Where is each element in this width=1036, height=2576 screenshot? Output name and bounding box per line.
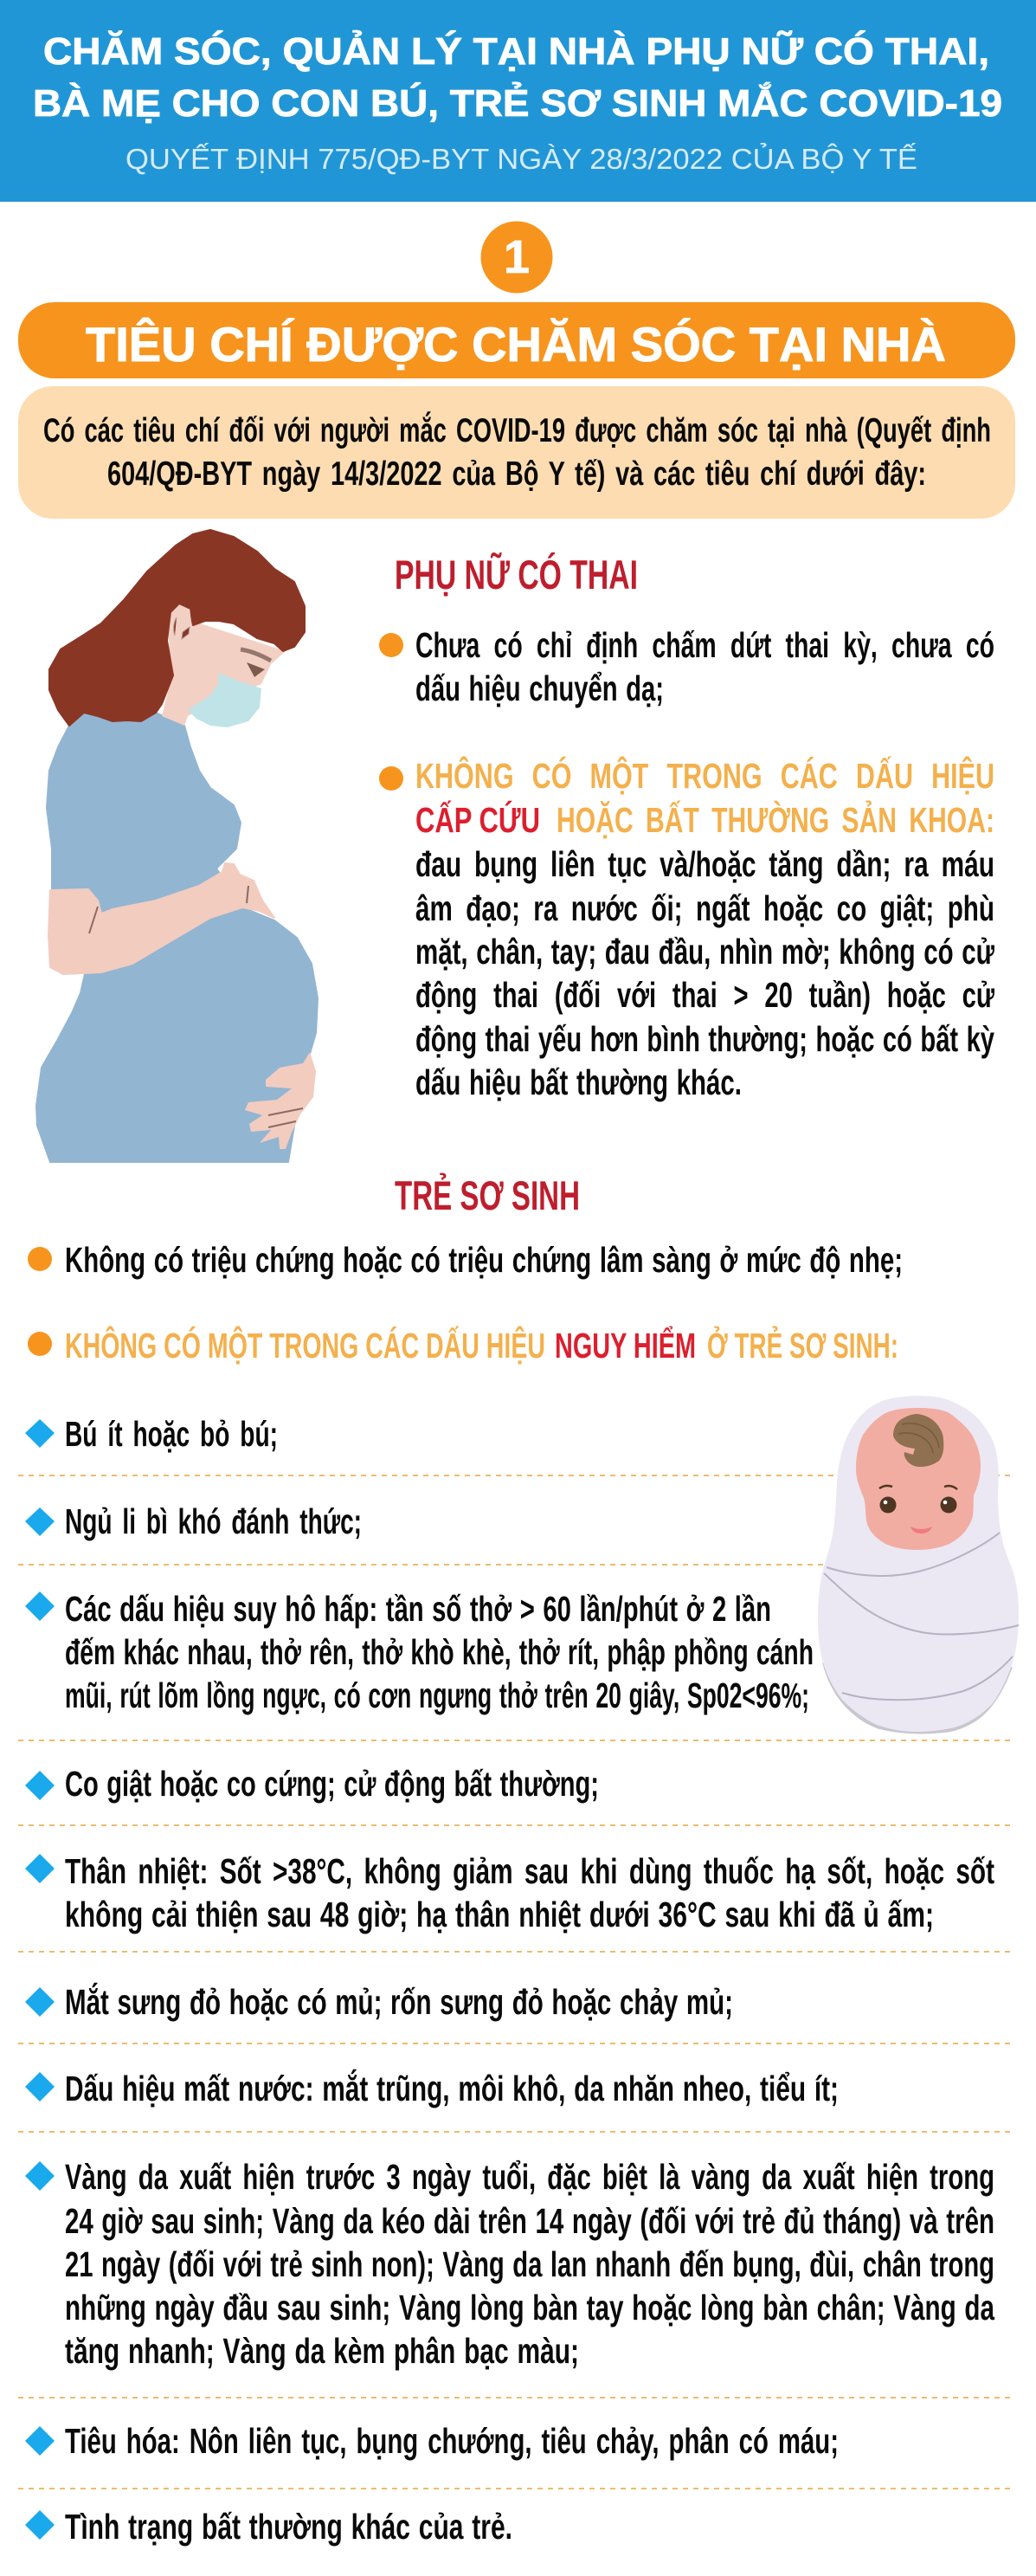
intro panel [18,386,1015,519]
criterion: no emergency signs: dấu hiệu bất thường khác. [415,1062,742,1102]
criterion: no emergency signs: CẤP CỨU [415,800,540,840]
panel: pregnant women criteria [379,552,994,1102]
heading: newborns: TRẺ SƠ SINH [395,1172,580,1218]
criterion: no danger signs: KHÔNG CÓ MỘT TRONG CÁC DẤU HIỆU [65,1326,545,1365]
illustration: swaddled newborn [818,1396,1019,1733]
hair curl [893,1414,943,1467]
criterion: no termination indication [379,625,994,708]
face mask [188,673,261,727]
title [33,29,1002,125]
swaddle shadow [822,1662,1013,1733]
swaddle folds [824,1533,1019,1700]
header banner [0,0,1036,202]
danger sign: other abnormalities: Tình trạng bất thường khác của trẻ. [65,2507,512,2547]
upper arm and hand [48,863,274,974]
eyes and brows [879,1486,957,1514]
hair strands [898,1424,939,1453]
danger sign: jaundice: tăng nhanh; Vàng da kèm phân bạc màu; [65,2331,579,2371]
danger sign: lethargy [25,1501,362,1541]
danger sign: jaundice [25,2157,995,2371]
danger sign: eyes and navel [25,1982,733,2022]
arm and hand creases [89,886,303,1127]
dress [36,713,318,1162]
section heading pill: TIÊU CHÍ ĐƯỢC CHĂM SÓC TẠI NHÀ [86,317,946,371]
danger sign: seizures: Co giật hoặc co cứng; cử động bất thường; [65,1764,599,1804]
danger sign: lethargy: Ngủ li bì khó đánh thức; [65,1501,362,1541]
danger sign: poor feeding [25,1414,278,1454]
criterion: no emergency signs [379,756,994,1102]
danger sign: poor feeding: Bú ít hoặc bỏ bú; [65,1414,278,1454]
eye and brow [241,649,271,677]
criterion: no danger signs: NGUY HIỂM [555,1325,696,1365]
section number badge: 1 [504,231,530,283]
danger sign: seizures [25,1764,599,1804]
subtitle: QUYẾT ĐỊNH 775/QĐ-BYT NGÀY 28/3/2022 CỦA BỘ Y TẾ [125,143,917,175]
lower hand [245,1052,316,1149]
danger sign: respiratory distress: Các dấu hiệu suy hô hấp: tần số thở > 60 lần/phút ở 2 lần [65,1589,771,1629]
criterion: no danger signs: Ở TRẺ SƠ SINH: [707,1326,898,1365]
title: BÀ MẸ CHO CON BÚ, TRẺ SƠ SINH MẮC COVID-19 [33,81,1002,125]
danger sign: respiratory distress [25,1589,814,1715]
danger sign: eyes and navel: Mắt sưng đỏ hoặc có mủ; rốn sưng đỏ hoặc chảy mủ; [65,1982,733,2022]
swaddle [818,1396,1019,1732]
criterion: no termination indication: dấu hiệu chuyển dạ; [415,668,664,708]
face and neck [162,604,286,726]
illustration: pregnant woman wearing a mask [36,530,318,1162]
face [856,1408,981,1550]
section number badge [481,222,552,293]
panel: newborn criteria [18,1172,1015,2547]
section heading pill [18,302,1015,378]
danger sign: other abnormalities [25,2507,512,2547]
mouth [911,1527,932,1533]
title: CHĂM SÓC, QUẢN LÝ TẠI NHÀ PHỤ NỮ CÓ THAI, [43,29,989,73]
heading: pregnant women: PHỤ NỮ CÓ THAI [395,552,638,597]
hair [49,530,305,726]
sideburn and ear detail [174,617,190,639]
danger sign: body temperature [25,1851,994,1934]
